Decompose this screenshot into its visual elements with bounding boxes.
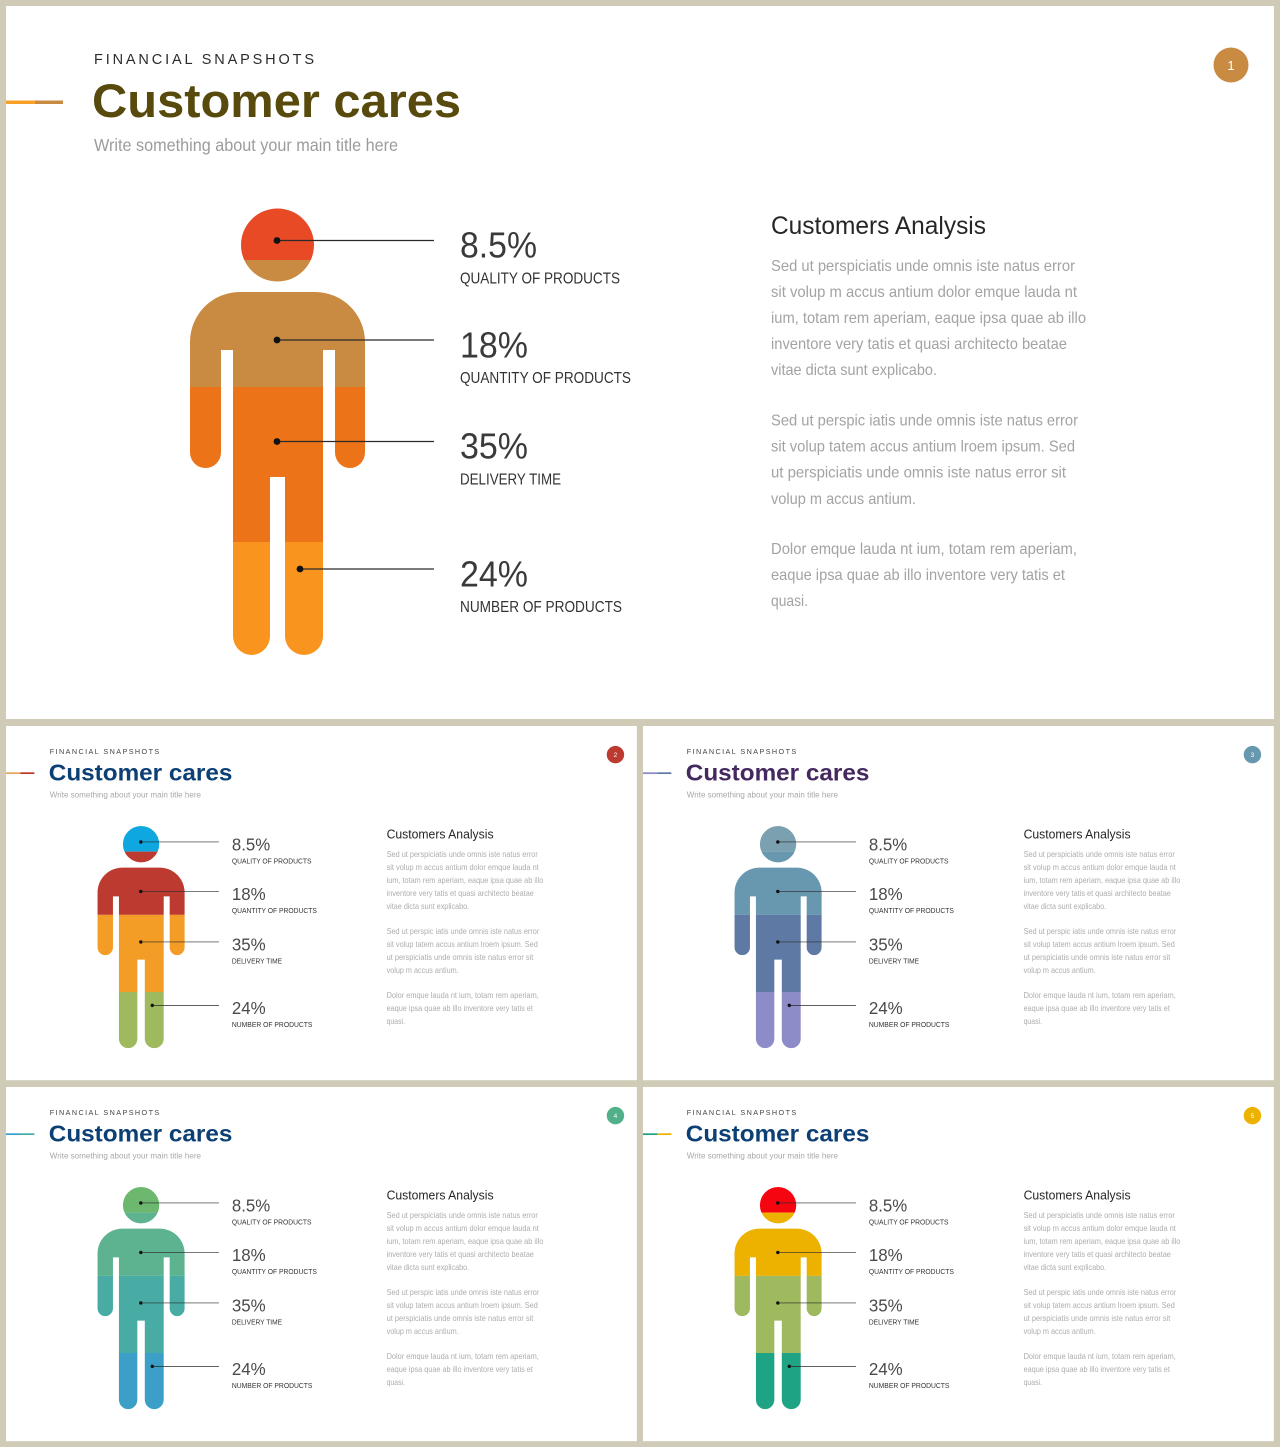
icon: person figure — [735, 826, 822, 1048]
stat: quantity — [869, 884, 954, 915]
middle body — [734, 914, 822, 992]
stat: quantity: QUANTITY OF PRODUCTS — [232, 906, 317, 915]
stat: delivery: 35% — [232, 934, 266, 954]
analysis text: sit volup m accus antium dolor emque lauda nt — [1024, 863, 1177, 872]
analysis text: sit volup m accus antium dolor emque lauda nt — [387, 863, 540, 872]
analysis text: ut perspiciatis unde omnis iste natus error sit — [1024, 953, 1171, 962]
analysis text: inventore very tatis et quasi architecto beatae — [771, 336, 1067, 353]
analysis text: eaque ipsa quae ab illo inventore very tatis et — [771, 567, 1066, 584]
head — [760, 826, 796, 862]
upper body — [98, 1228, 185, 1276]
stat: delivery: 35% — [869, 1295, 903, 1315]
page number badge: 3 — [1251, 752, 1255, 759]
analysis text — [387, 1211, 544, 1387]
stat: quality: 8.5% — [869, 834, 907, 854]
stat: quantity: QUANTITY OF PRODUCTS — [869, 1267, 954, 1276]
analysis text: Sed ut perspiciatis unde omnis iste natus error — [771, 258, 1076, 275]
analysis text: sit volup m accus antium dolor emque lauda nt — [387, 1224, 540, 1233]
stat: number: NUMBER OF PRODUCTS — [869, 1020, 949, 1029]
analysis text: vitae dicta sunt explicabo. — [387, 902, 469, 911]
analysis text: Sed ut perspic iatis unde omnis iste natus error — [387, 927, 540, 936]
stat: delivery — [869, 1295, 919, 1326]
analysis heading: Customers Analysis — [771, 212, 986, 240]
stat: quantity: QUANTITY OF PRODUCTS — [869, 906, 954, 915]
stat: delivery: DELIVERY TIME — [460, 472, 561, 488]
analysis text: Sed ut perspiciatis unde omnis iste natus error — [1024, 850, 1175, 859]
analysis text: Sed ut perspiciatis unde omnis iste natus error — [1024, 1211, 1175, 1220]
analysis text: sit volup tatem accus antium lroem ipsum. Sed — [387, 940, 538, 949]
accent line — [6, 100, 63, 104]
analysis text — [1024, 1211, 1181, 1387]
subtitle: Write something about your main title here — [50, 789, 201, 799]
accent line — [643, 1133, 671, 1135]
analysis text: volup m accus antium. — [1024, 966, 1096, 975]
analysis text: eaque ipsa quae ab illo inventore very tatis et — [387, 1365, 534, 1374]
eyebrow: FINANCIAL SNAPSHOTS — [50, 747, 159, 756]
analysis text: ut perspiciatis unde omnis iste natus error sit — [387, 1314, 534, 1323]
analysis text: sit volup tatem accus antium lroem ipsum. Sed — [771, 438, 1075, 456]
icon: person figure — [735, 1187, 822, 1409]
accent line — [6, 772, 34, 774]
analysis text: quasi. — [387, 1017, 405, 1026]
analysis text: quasi. — [771, 593, 808, 610]
stat: quantity — [869, 1245, 954, 1276]
leader lines — [274, 237, 434, 572]
page number badge — [1244, 1107, 1261, 1124]
analysis text: Dolor emque lauda nt ium, totam rem aperiam, — [771, 541, 1077, 558]
analysis text: Dolor emque lauda nt ium, totam rem aperiam, — [387, 1352, 539, 1361]
middle body — [98, 914, 185, 992]
page number badge — [1214, 48, 1248, 82]
analysis text: Sed ut perspic iatis unde omnis iste natus error — [771, 412, 1079, 430]
analysis text — [771, 258, 1086, 610]
stat: quantity: 18% — [460, 324, 528, 366]
leader lines — [139, 840, 219, 1007]
page number badge — [1244, 746, 1261, 763]
stat: quality — [460, 224, 620, 288]
stat: quantity: 18% — [232, 1245, 266, 1265]
analysis text: ium, totam rem aperiam, eaque ipsa quae ab illo — [387, 1237, 544, 1246]
analysis text: Sed ut perspiciatis unde omnis iste natus error — [387, 1211, 538, 1220]
analysis text: ium, totam rem aperiam, eaque ipsa quae ab illo — [387, 876, 544, 885]
stat: number — [232, 998, 312, 1029]
stat: quantity — [460, 324, 631, 387]
analysis text: Sed ut perspic iatis unde omnis iste natus error — [1024, 1288, 1177, 1297]
stat: delivery: DELIVERY TIME — [232, 1317, 282, 1326]
stat: quality: QUALITY OF PRODUCTS — [869, 1217, 948, 1226]
stat: quality: 8.5% — [232, 1195, 270, 1215]
analysis text — [1024, 850, 1181, 1026]
analysis text: Sed ut perspic iatis unde omnis iste natus error — [387, 1288, 540, 1297]
analysis text: sit volup m accus antium dolor emque lauda nt — [771, 284, 1078, 301]
analysis heading: Customers Analysis — [1024, 828, 1131, 842]
legs — [756, 1353, 801, 1410]
analysis text: volup m accus antium. — [387, 1327, 459, 1336]
panel: slide 3 (blue and purple) — [643, 726, 1274, 1080]
title: Customer cares — [49, 1121, 232, 1147]
analysis text: Dolor emque lauda nt ium, totam rem aperiam, — [1024, 991, 1176, 1000]
eyebrow: FINANCIAL SNAPSHOTS — [687, 747, 796, 756]
page number badge: 1 — [1227, 58, 1235, 73]
analysis text: quasi. — [1024, 1378, 1042, 1387]
analysis heading: Customers Analysis — [1024, 1189, 1131, 1203]
eyebrow: FINANCIAL SNAPSHOTS — [687, 1108, 796, 1117]
stat: number: NUMBER OF PRODUCTS — [232, 1381, 312, 1390]
panel: slide 4 (green and teal) — [6, 1087, 637, 1441]
analysis text: vitae dicta sunt explicabo. — [1024, 1263, 1106, 1272]
legs — [118, 992, 164, 1048]
analysis text: Sed ut perspic iatis unde omnis iste natus error — [1024, 927, 1177, 936]
stat: number: 24% — [460, 554, 528, 594]
title: Customer cares — [49, 760, 232, 786]
analysis text: sit volup tatem accus antium lroem ipsum. Sed — [1024, 940, 1175, 949]
stat: quality: 8.5% — [232, 834, 270, 854]
page number badge: 2 — [614, 752, 618, 759]
stat: delivery — [869, 934, 919, 965]
stat: number: 24% — [869, 998, 903, 1018]
leader lines — [139, 1201, 219, 1368]
title: Customer cares — [686, 760, 869, 786]
stat: quantity — [232, 1245, 317, 1276]
icon: person figure — [98, 826, 185, 1048]
analysis text: eaque ipsa quae ab illo inventore very tatis et — [1024, 1004, 1171, 1013]
analysis heading: Customers Analysis — [387, 1189, 494, 1203]
title: Customer cares — [686, 1121, 869, 1147]
stat: number — [869, 998, 949, 1029]
stat: quality: QUALITY OF PRODUCTS — [869, 856, 948, 865]
stat: number: 24% — [232, 998, 266, 1018]
stat: quantity: QUANTITY OF PRODUCTS — [232, 1267, 317, 1276]
upper body — [98, 868, 185, 915]
analysis text: vitae dicta sunt explicabo. — [387, 1263, 469, 1272]
analysis text: ium, totam rem aperiam, eaque ipsa quae ab illo — [1024, 876, 1181, 885]
subtitle: Write something about your main title here — [687, 789, 838, 799]
middle body — [734, 1276, 822, 1353]
stat: delivery: 35% — [869, 934, 903, 954]
analysis text: ut perspiciatis unde omnis iste natus error sit — [771, 464, 1067, 482]
stat: quantity — [232, 884, 317, 915]
stat: delivery: DELIVERY TIME — [869, 1317, 919, 1326]
stat: delivery: 35% — [232, 1295, 266, 1315]
eyebrow: FINANCIAL SNAPSHOTS — [94, 52, 314, 68]
legs — [233, 542, 323, 655]
analysis text: ium, totam rem aperiam, eaque ipsa quae ab illo — [771, 310, 1086, 327]
page number badge: 4 — [614, 1113, 618, 1120]
eyebrow: FINANCIAL SNAPSHOTS — [50, 1108, 159, 1117]
stat: quality: QUALITY OF PRODUCTS — [460, 270, 620, 288]
stat: number — [232, 1359, 312, 1390]
upper body — [734, 868, 822, 915]
stat: delivery: DELIVERY TIME — [869, 956, 919, 965]
title: Customer cares — [92, 74, 461, 127]
middle body — [190, 387, 365, 542]
analysis text: volup m accus antium. — [1024, 1327, 1096, 1336]
analysis text: volup m accus antium. — [771, 491, 916, 508]
analysis text: Dolor emque lauda nt ium, totam rem aperiam, — [387, 991, 539, 1000]
analysis text: eaque ipsa quae ab illo inventore very tatis et — [1024, 1365, 1171, 1374]
analysis text: quasi. — [387, 1378, 405, 1387]
legs — [756, 992, 801, 1048]
stat: quality — [232, 1195, 311, 1226]
stat: quality — [232, 834, 311, 865]
stat: delivery — [460, 426, 561, 488]
analysis text: inventore very tatis et quasi architecto beatae — [1024, 1250, 1171, 1259]
stat: number: NUMBER OF PRODUCTS — [232, 1020, 312, 1029]
stat: quality: QUALITY OF PRODUCTS — [232, 856, 311, 865]
analysis text: sit volup tatem accus antium lroem ipsum. Sed — [387, 1301, 538, 1310]
analysis text: sit volup tatem accus antium lroem ipsum. Sed — [1024, 1301, 1175, 1310]
stat: delivery: 35% — [460, 426, 528, 466]
page number badge — [607, 746, 624, 763]
stat: number — [460, 554, 622, 616]
analysis text: volup m accus antium. — [387, 966, 459, 975]
analysis text: inventore very tatis et quasi architecto beatae — [1024, 889, 1171, 898]
upper body — [734, 1228, 822, 1276]
stat: quantity: 18% — [232, 884, 266, 904]
panel: slide 1 (orange) — [6, 6, 1274, 719]
accent line — [6, 1133, 34, 1135]
analysis text: ut perspiciatis unde omnis iste natus error sit — [1024, 1314, 1171, 1323]
stat: quality — [869, 1195, 948, 1226]
stat: number — [869, 1359, 949, 1390]
analysis text: ut perspiciatis unde omnis iste natus error sit — [387, 953, 534, 962]
stat: delivery — [232, 934, 282, 965]
head — [241, 208, 314, 282]
stat: delivery: DELIVERY TIME — [232, 956, 282, 965]
stat: quantity: 18% — [869, 1245, 903, 1265]
stat: quality: 8.5% — [460, 224, 537, 266]
head — [123, 826, 159, 862]
panel: slide 5 (red, yellow, green) — [643, 1087, 1274, 1441]
subtitle: Write something about your main title here — [94, 135, 398, 155]
page number badge: 5 — [1251, 1113, 1255, 1120]
middle body — [98, 1276, 185, 1353]
analysis text — [387, 850, 544, 1026]
analysis text: inventore very tatis et quasi architecto beatae — [387, 889, 534, 898]
analysis text: quasi. — [1024, 1017, 1042, 1026]
stat: delivery — [232, 1295, 282, 1326]
stat: number: NUMBER OF PRODUCTS — [460, 599, 622, 616]
stat: quality: 8.5% — [869, 1195, 907, 1215]
subtitle: Write something about your main title here — [50, 1150, 201, 1160]
analysis text: sit volup m accus antium dolor emque lauda nt — [1024, 1224, 1177, 1233]
stat: quality: QUALITY OF PRODUCTS — [232, 1217, 311, 1226]
analysis text: vitae dicta sunt explicabo. — [771, 362, 937, 379]
stat: number: 24% — [869, 1359, 903, 1379]
stat: quantity: QUANTITY OF PRODUCTS — [460, 370, 631, 387]
stat: quality — [869, 834, 948, 865]
accent line — [643, 772, 671, 774]
icon: person figure — [190, 208, 365, 655]
head — [123, 1187, 159, 1223]
legs — [118, 1353, 164, 1410]
stat: quantity: 18% — [869, 884, 903, 904]
analysis text: ium, totam rem aperiam, eaque ipsa quae ab illo — [1024, 1237, 1181, 1246]
leader lines — [776, 1201, 856, 1368]
analysis text: inventore very tatis et quasi architecto beatae — [387, 1250, 534, 1259]
head — [760, 1187, 796, 1223]
upper body — [190, 292, 365, 387]
icon: person figure — [98, 1187, 185, 1409]
analysis text: vitae dicta sunt explicabo. — [1024, 902, 1106, 911]
analysis text: Dolor emque lauda nt ium, totam rem aperiam, — [1024, 1352, 1176, 1361]
leader lines — [776, 840, 856, 1007]
analysis text: eaque ipsa quae ab illo inventore very tatis et — [387, 1004, 534, 1013]
stat: number: 24% — [232, 1359, 266, 1379]
panel: slide 2 (red and blue) — [6, 726, 637, 1080]
stat: number: NUMBER OF PRODUCTS — [869, 1381, 949, 1390]
page number badge — [607, 1107, 624, 1124]
analysis text: Sed ut perspiciatis unde omnis iste natus error — [387, 850, 538, 859]
subtitle: Write something about your main title here — [687, 1150, 838, 1160]
analysis heading: Customers Analysis — [387, 828, 494, 842]
